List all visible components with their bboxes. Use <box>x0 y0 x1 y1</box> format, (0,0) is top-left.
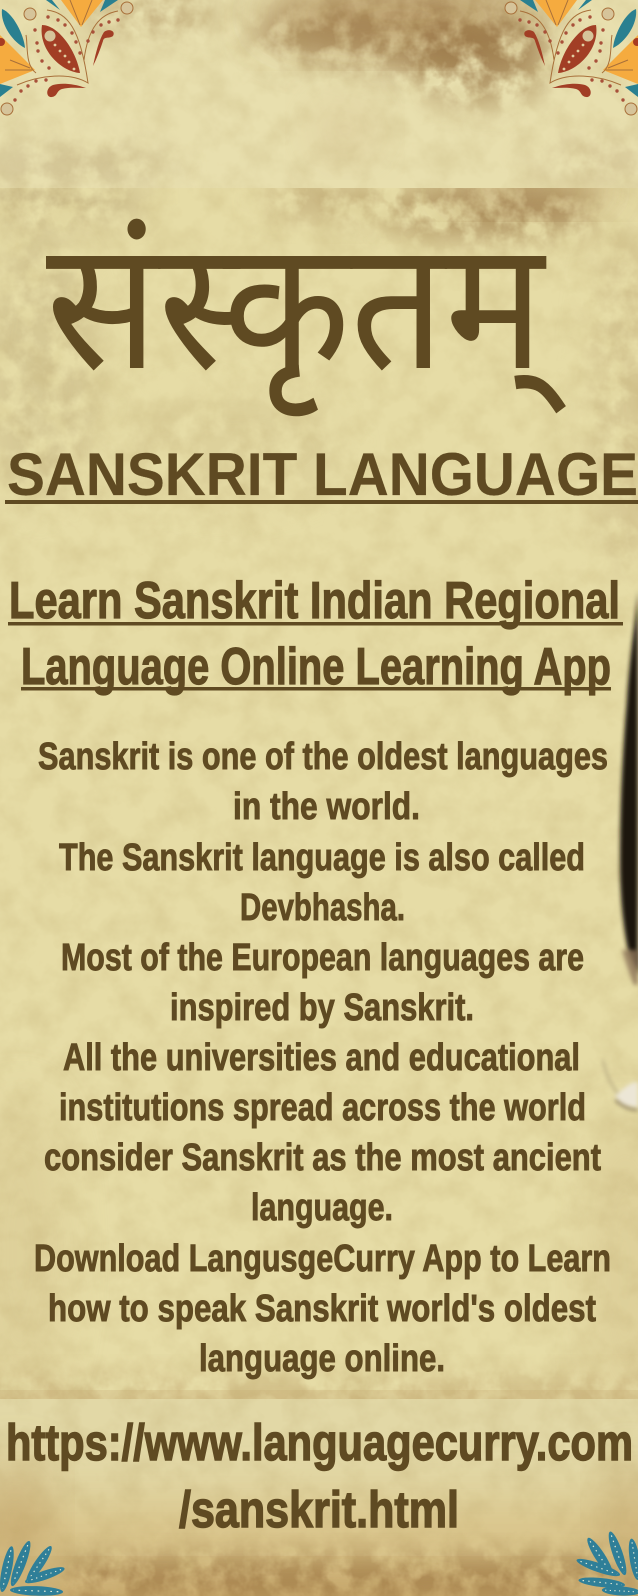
corner ornament: top right <box>505 0 638 115</box>
body text: language. <box>251 1187 393 1229</box>
edge figure: dark hair at right <box>603 590 638 1110</box>
body text: Devbhasha. <box>240 887 405 929</box>
body text: language online. <box>199 1338 445 1380</box>
website url <box>6 1414 633 1538</box>
leaf cluster: bottom left <box>0 1539 66 1596</box>
body text: inspired by Sanskrit. <box>170 987 474 1029</box>
website url: /sanskrit.html <box>179 1481 459 1538</box>
devanagari title: संस्कृतम् <box>46 206 566 416</box>
body text: in the world. <box>233 786 420 828</box>
subtitle <box>8 572 623 696</box>
top strip texture <box>0 0 638 188</box>
footer panel texture <box>0 1399 638 1596</box>
body text <box>34 736 611 1380</box>
corner ornament: top left <box>0 0 133 115</box>
main panel texture <box>0 174 638 1430</box>
leaf cluster: bottom right <box>575 1530 638 1596</box>
